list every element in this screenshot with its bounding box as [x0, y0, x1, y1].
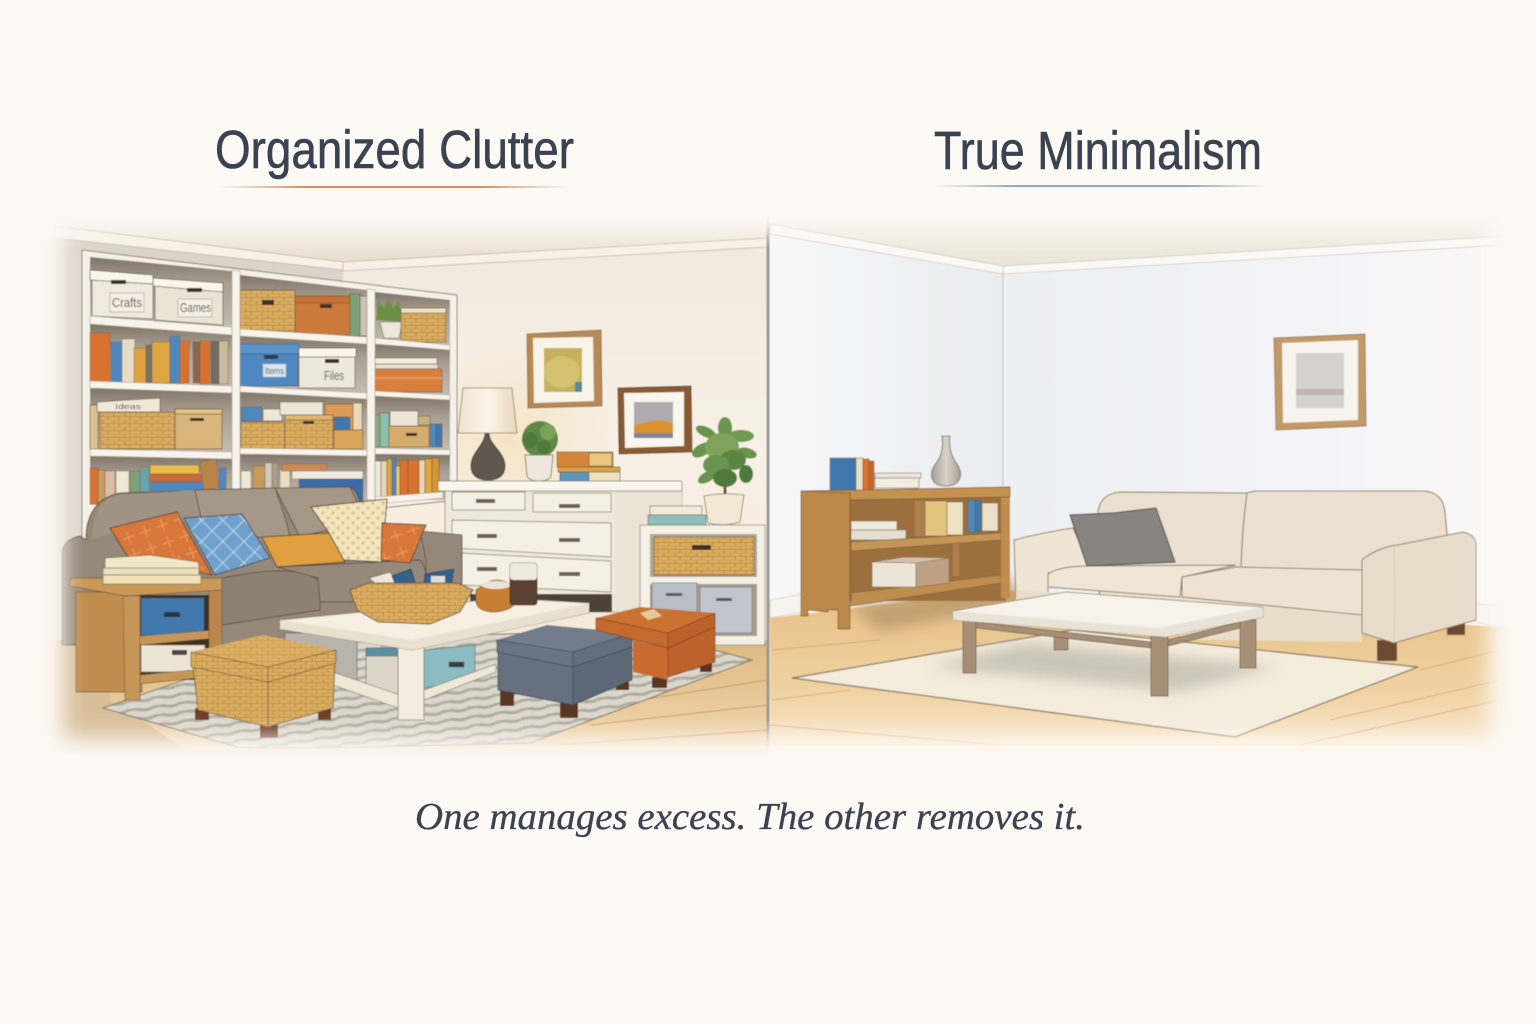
gray throw pillow — [1070, 508, 1175, 566]
books on end table — [103, 555, 201, 584]
boxes on bottom shelf — [872, 557, 949, 587]
books and box: column 2 row 4 — [241, 463, 363, 505]
books on shelf — [851, 500, 998, 540]
woven basket with items — [350, 569, 473, 624]
sofa back — [1098, 491, 1448, 620]
sofa feet — [1377, 618, 1465, 661]
books: column 1 row 2 — [90, 333, 228, 384]
bookcase — [82, 250, 457, 540]
box: Games: Games — [180, 300, 211, 315]
left sofa arm — [1014, 528, 1090, 598]
box: Crafts — [90, 270, 153, 319]
storage: column 2 row 3 — [241, 402, 363, 449]
orange ottoman — [596, 607, 715, 688]
title: True Minimalism: True Minimalism — [934, 121, 1262, 181]
dresser — [438, 481, 682, 612]
shelf compartments — [90, 257, 450, 505]
book stack on cabinet — [648, 506, 706, 525]
leafy plant in cream pot — [689, 417, 758, 525]
rug — [103, 630, 752, 748]
sofa base — [1016, 590, 1362, 642]
illustration: two rooms — [30, 210, 1536, 755]
rug shadow — [928, 643, 1277, 692]
wall art: landscape frames — [527, 330, 692, 454]
box: blue storage: Items — [265, 366, 284, 376]
small white cabinet with bins — [640, 506, 765, 645]
sofa seats — [1048, 565, 1362, 615]
frame: sunset landscape art — [618, 386, 692, 454]
wicker bin — [654, 537, 754, 575]
books: column 1 row 4 — [90, 459, 226, 504]
frame: yellow tree art — [527, 330, 602, 408]
framed wall art — [1274, 334, 1366, 430]
white coffee table — [953, 592, 1263, 696]
beige sofa — [1014, 491, 1476, 661]
wooden bowl and cup — [476, 563, 537, 612]
rug — [792, 630, 1418, 737]
room shell: ceiling walls floor — [30, 210, 768, 755]
room shell: ceiling walls floor — [770, 210, 1536, 755]
heading underline: orange — [218, 186, 568, 188]
plant: small shelf plant — [376, 298, 402, 338]
box: Files — [299, 348, 356, 388]
heading underline: blue — [933, 185, 1268, 187]
bookcase dividers — [914, 500, 960, 577]
panel: true minimalism room — [770, 210, 1536, 755]
infographic: organized clutter vs true minimalism — [48, 128, 1504, 838]
box: Games — [153, 278, 223, 325]
white box in table — [141, 645, 205, 672]
box: Files: Files — [324, 368, 344, 383]
blue-grey ottoman — [497, 625, 632, 718]
box: blue storage — [240, 344, 299, 386]
grey fabric bins — [652, 583, 752, 633]
caption: One manages excess. The other removes it. — [415, 796, 1085, 838]
title: Organized Clutter: Organized Clutter — [215, 120, 574, 180]
wooden end table — [70, 555, 222, 700]
shadow under bookcase — [850, 580, 1040, 632]
blue box in table — [141, 598, 204, 635]
potted plant on dresser — [522, 421, 558, 481]
shelves and uprights — [90, 270, 450, 505]
divider between rooms — [766, 216, 770, 752]
wicker ottoman — [191, 635, 336, 738]
low wooden bookcase — [801, 436, 1010, 629]
coffee table — [280, 598, 589, 720]
storage: column 2 row 1 — [240, 290, 367, 336]
dresser drawers — [452, 492, 611, 592]
right sofa arm — [1362, 532, 1476, 643]
items under coffee table — [285, 633, 475, 695]
stacked books on dresser — [557, 452, 620, 482]
storage: column 1 row 3: Ideas — [115, 404, 142, 411]
box: Crafts: Crafts — [112, 295, 142, 310]
books on top of bookcase — [830, 458, 921, 490]
storage: column 1 row 3 — [90, 398, 222, 449]
sofa pillows — [110, 499, 426, 575]
vase — [932, 436, 961, 486]
storage: column 3 — [375, 308, 446, 498]
sofa seat cushions — [222, 560, 428, 625]
panel: organized clutter room — [30, 210, 768, 755]
lamp — [458, 388, 517, 480]
gray sofa — [62, 487, 462, 660]
